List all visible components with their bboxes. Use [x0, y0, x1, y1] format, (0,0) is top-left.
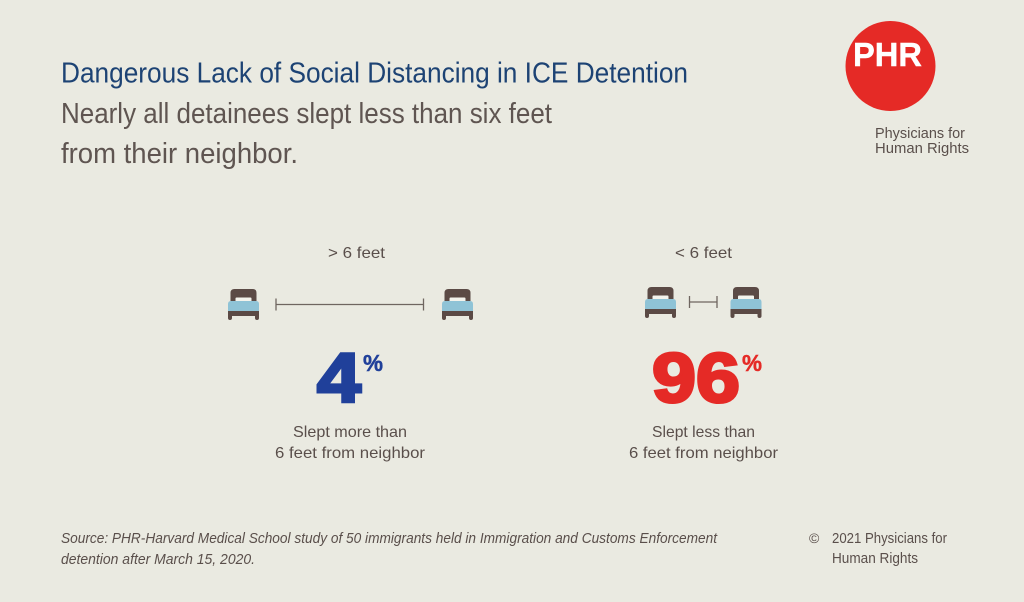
PHR logo: Human Rights — [875, 140, 969, 157]
caption: Slept less than — [652, 424, 755, 441]
subtitle — [61, 98, 552, 170]
PHR logo — [846, 21, 969, 157]
PHR logo: Physicians for — [875, 125, 965, 142]
subtitle: Nearly all detainees slept less than six feet — [61, 98, 552, 130]
PHR logo: PHR — [853, 36, 922, 73]
label: less than 6 feet: < 6 feet — [675, 245, 733, 262]
stat: 96 percent: % — [742, 350, 762, 376]
arrow: wide distance bracket — [276, 298, 424, 310]
caption — [275, 424, 426, 462]
panel: less than 6 feet — [629, 245, 779, 462]
label: greater than 6 feet: > 6 feet — [328, 245, 386, 262]
panel: more than 6 feet — [228, 245, 473, 462]
arrow: narrow distance bracket — [690, 296, 717, 308]
source note: Source: PHR-Harvard Medical School study of 50 immigrants held in Immigration and Customs Enforcement — [61, 531, 718, 547]
icon: left bed — [228, 289, 259, 320]
stat: 96 percent: 96 — [652, 339, 740, 417]
stat: 4 percent: % — [363, 350, 383, 376]
caption — [629, 424, 779, 462]
copyright: © — [809, 530, 820, 546]
stat: 4 percent — [317, 339, 383, 417]
copyright: 2021 Physicians for — [832, 531, 947, 547]
caption: Slept more than — [293, 424, 407, 441]
caption: 6 feet from neighbor — [275, 445, 426, 462]
icon: left bed — [645, 287, 676, 318]
source note — [61, 531, 718, 568]
source note: detention after March 15, 2020. — [61, 552, 255, 568]
stat: 4 percent: 4 — [317, 339, 361, 417]
subtitle: from their neighbor. — [61, 138, 298, 170]
caption: 6 feet from neighbor — [629, 445, 779, 462]
icon: right bed — [442, 289, 473, 320]
title: Dangerous Lack of Social Distancing in ICE Detention — [61, 58, 688, 90]
copyright — [809, 530, 947, 567]
icon: right bed — [730, 287, 762, 318]
copyright: Human Rights — [832, 551, 918, 567]
